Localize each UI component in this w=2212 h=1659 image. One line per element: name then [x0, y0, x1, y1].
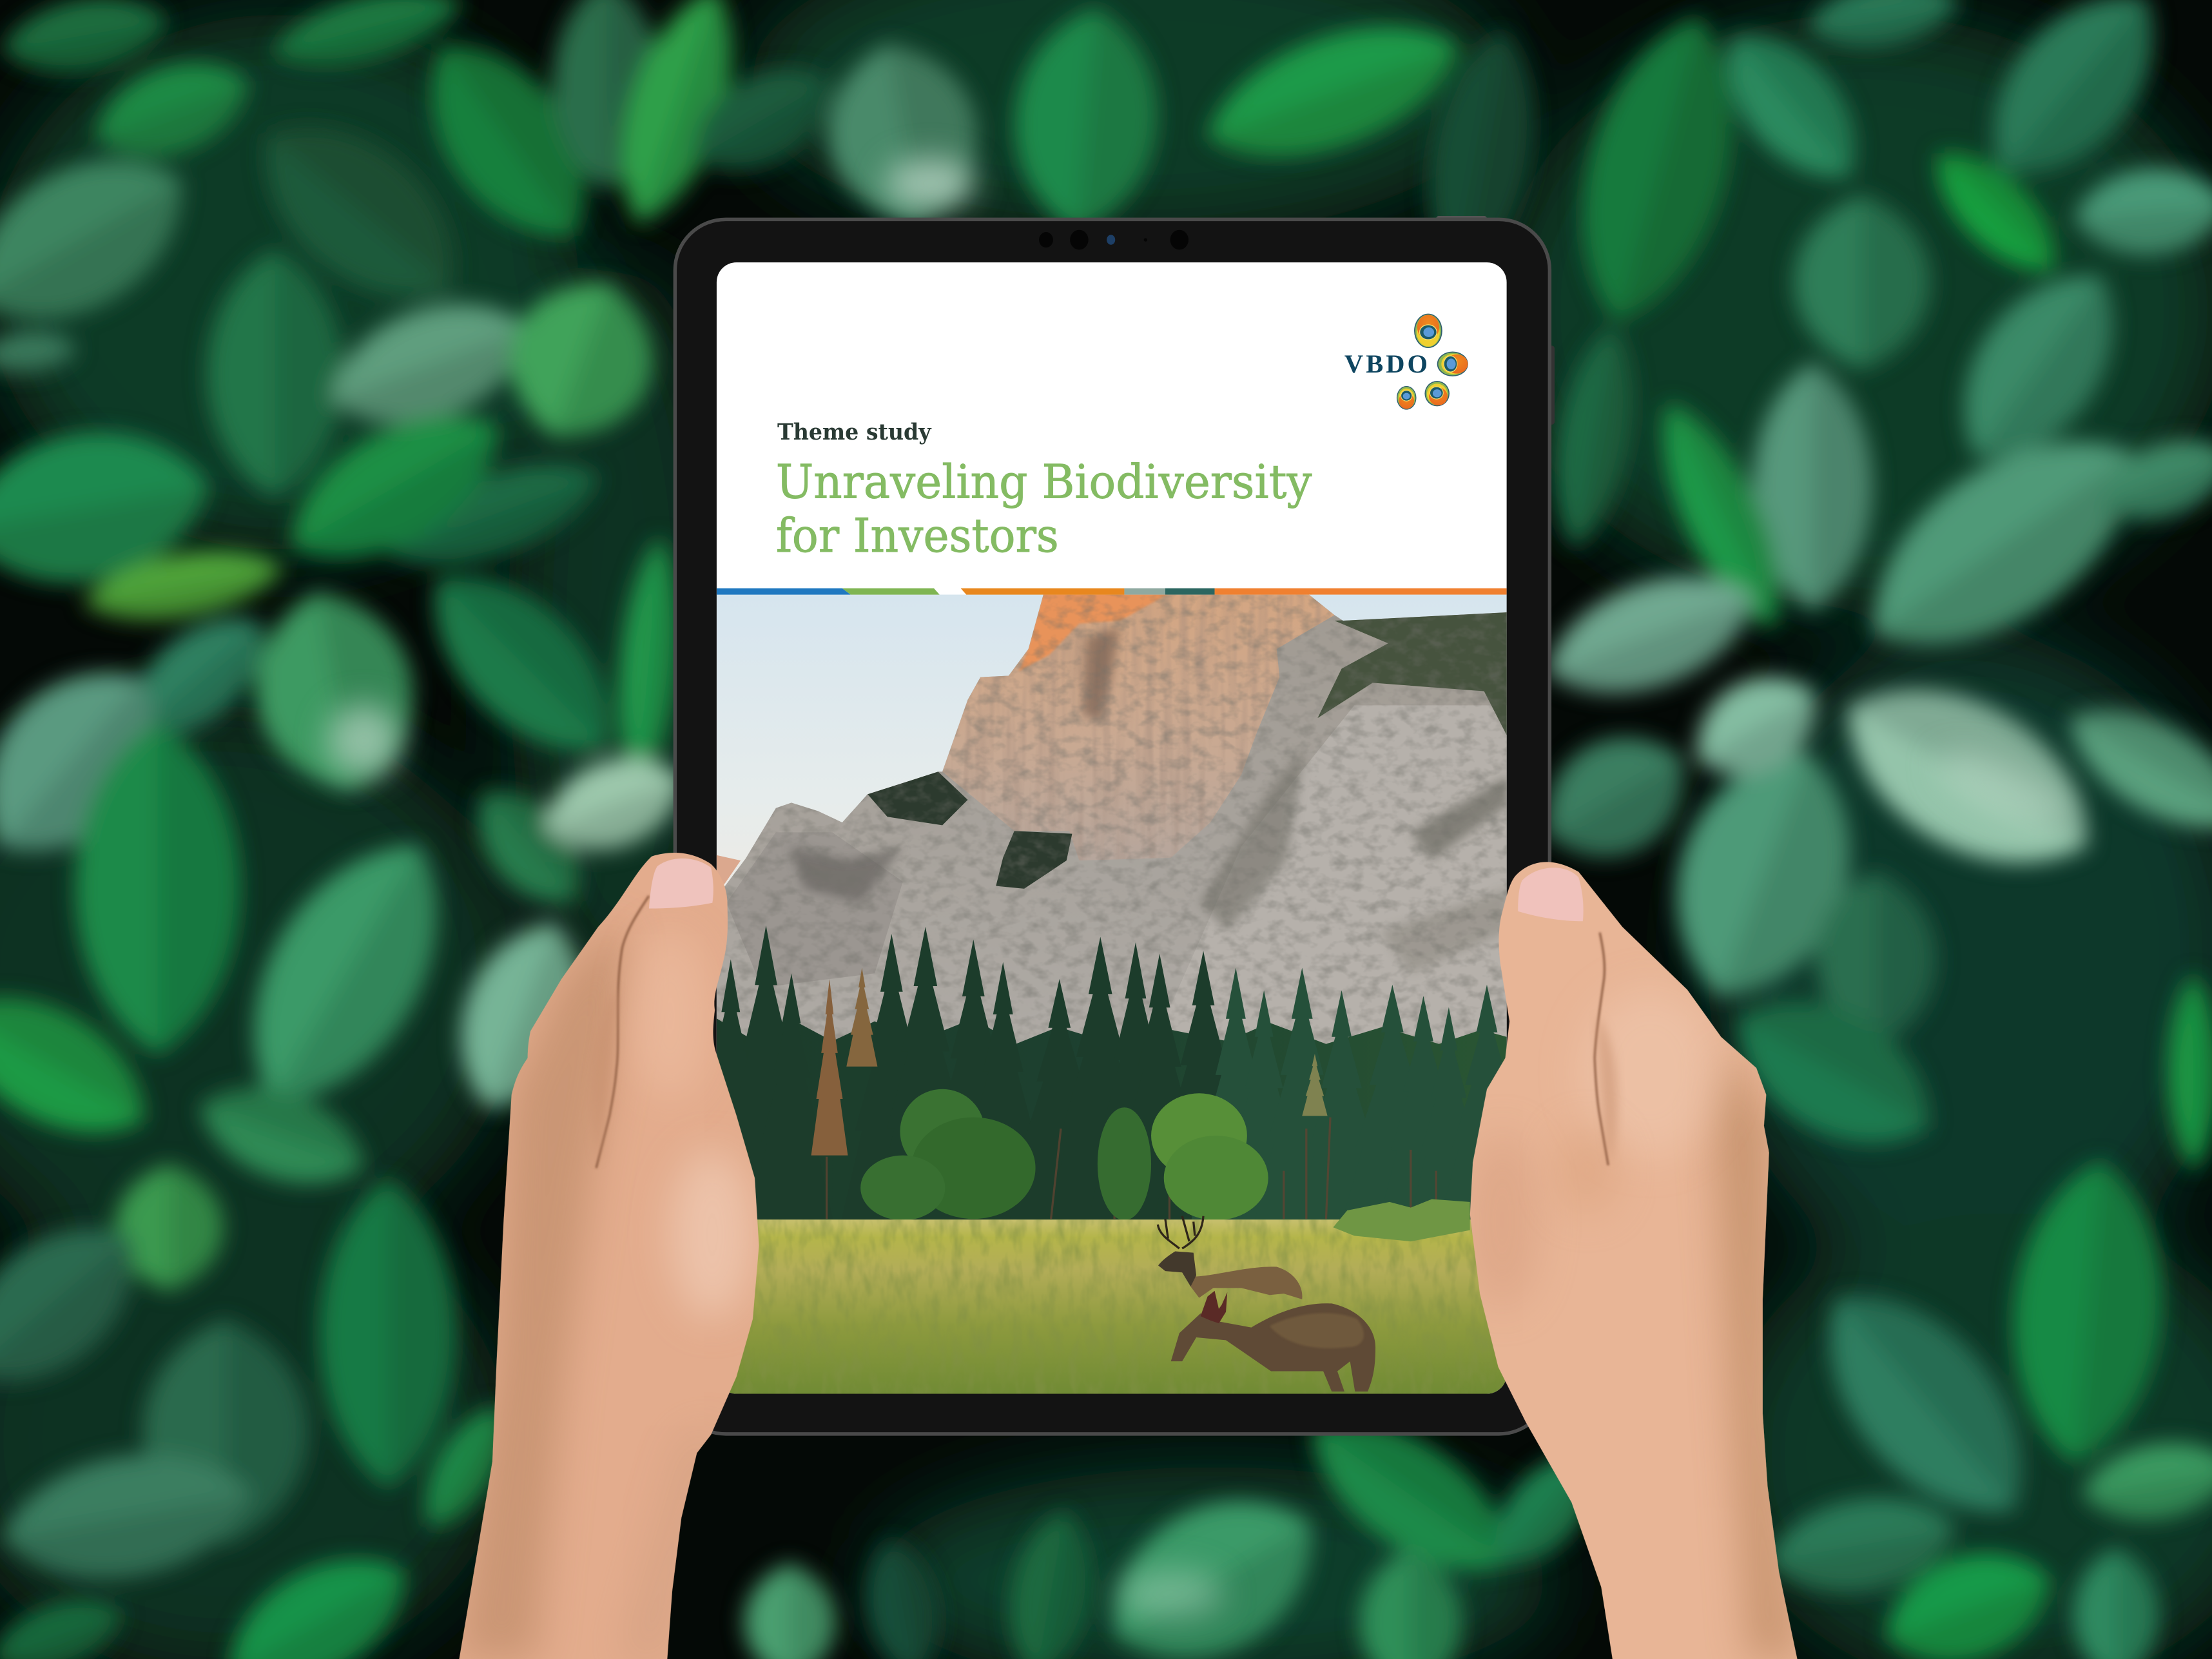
title: Unraveling Biodiversity — [776, 456, 1312, 510]
meadow — [717, 1199, 1507, 1396]
tablet body — [675, 219, 1549, 1434]
left thumbnail — [649, 859, 713, 909]
orange conifers — [811, 979, 848, 1156]
tablet device — [675, 216, 1555, 1434]
cover photo: Half Dome with deer — [688, 592, 1535, 1396]
tree trunks — [827, 1118, 1436, 1219]
right hand shape — [1470, 862, 1797, 1659]
colour band — [717, 588, 1507, 595]
logo mark: right blob — [1437, 351, 1468, 376]
left hand shading — [458, 917, 755, 1659]
sky — [717, 594, 1507, 887]
right hand — [1466, 862, 1797, 1659]
logo wordmark: VBDO — [1344, 349, 1428, 378]
broadleaf trees — [860, 1089, 1268, 1220]
right thumbnail — [1518, 868, 1584, 921]
mountain — [715, 592, 1508, 1100]
deer: stag — [1158, 1216, 1302, 1299]
logo mark: lower right blob — [1424, 381, 1450, 406]
eyebrow: Theme study: Theme study — [777, 420, 932, 445]
right hand shading — [1466, 987, 1797, 1659]
logo mark: top blob — [1414, 314, 1442, 348]
VBDO logo — [1344, 314, 1468, 410]
camera array — [1039, 230, 1188, 249]
distant pink peak — [715, 855, 741, 895]
logo mark: lower left blob — [1397, 386, 1417, 410]
tablet top button — [1436, 216, 1487, 223]
left hand shape — [459, 853, 759, 1659]
screen — [717, 262, 1507, 1394]
left thumb crease — [596, 896, 649, 1168]
tablet side buttons — [1549, 345, 1555, 425]
right thumb crease — [1595, 933, 1608, 1165]
screen content: report cover — [688, 314, 1535, 1396]
title — [776, 456, 1312, 563]
forest — [688, 926, 1535, 1227]
title: for Investors — [776, 509, 1059, 563]
deer: doe — [1171, 1291, 1375, 1392]
left hand — [458, 853, 759, 1659]
